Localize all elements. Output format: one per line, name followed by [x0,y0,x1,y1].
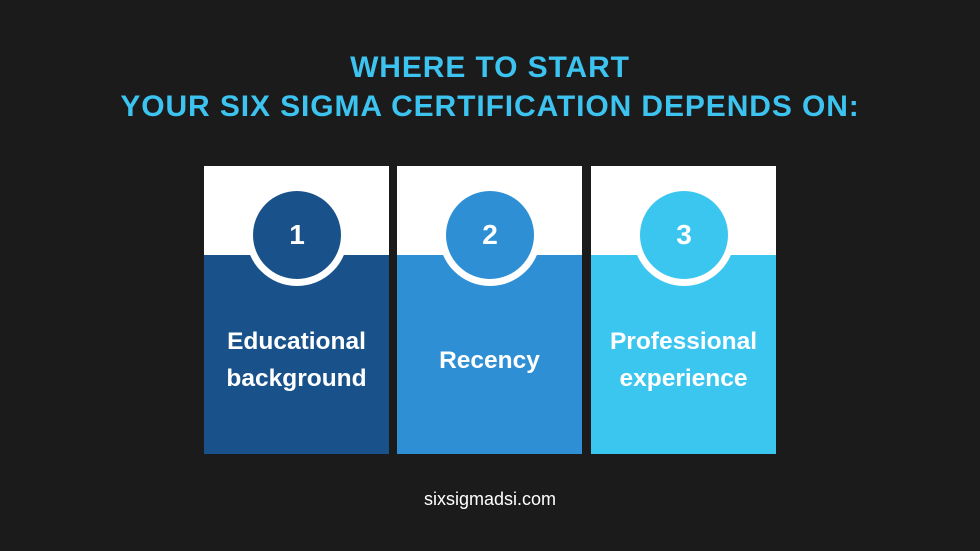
icon: number 2 circle [439,184,541,286]
icon: number 3 circle [633,184,735,286]
label 2: Recency [439,347,540,374]
icon: number 1 circle [246,184,348,286]
card 3: professional experience [591,166,776,454]
label 3: experience [619,365,748,392]
label 3 [610,328,757,392]
title: YOUR SIX SIGMA CERTIFICATION DEPENDS ON: [120,90,860,123]
card 2: recency [397,166,582,454]
title [120,51,860,123]
footer url: sixsigmadsi.com [424,489,556,509]
label 1: background [226,365,367,392]
card 1: educational background [204,166,389,454]
icon: number 3 circle: 3 [676,219,692,250]
icon: number 2 circle: 2 [482,219,498,250]
title: WHERE TO START [350,51,630,84]
label 1: Educational [227,328,366,355]
icon: number 1 circle: 1 [289,219,305,250]
label 1 [226,328,367,392]
label 3: Professional [610,328,757,355]
